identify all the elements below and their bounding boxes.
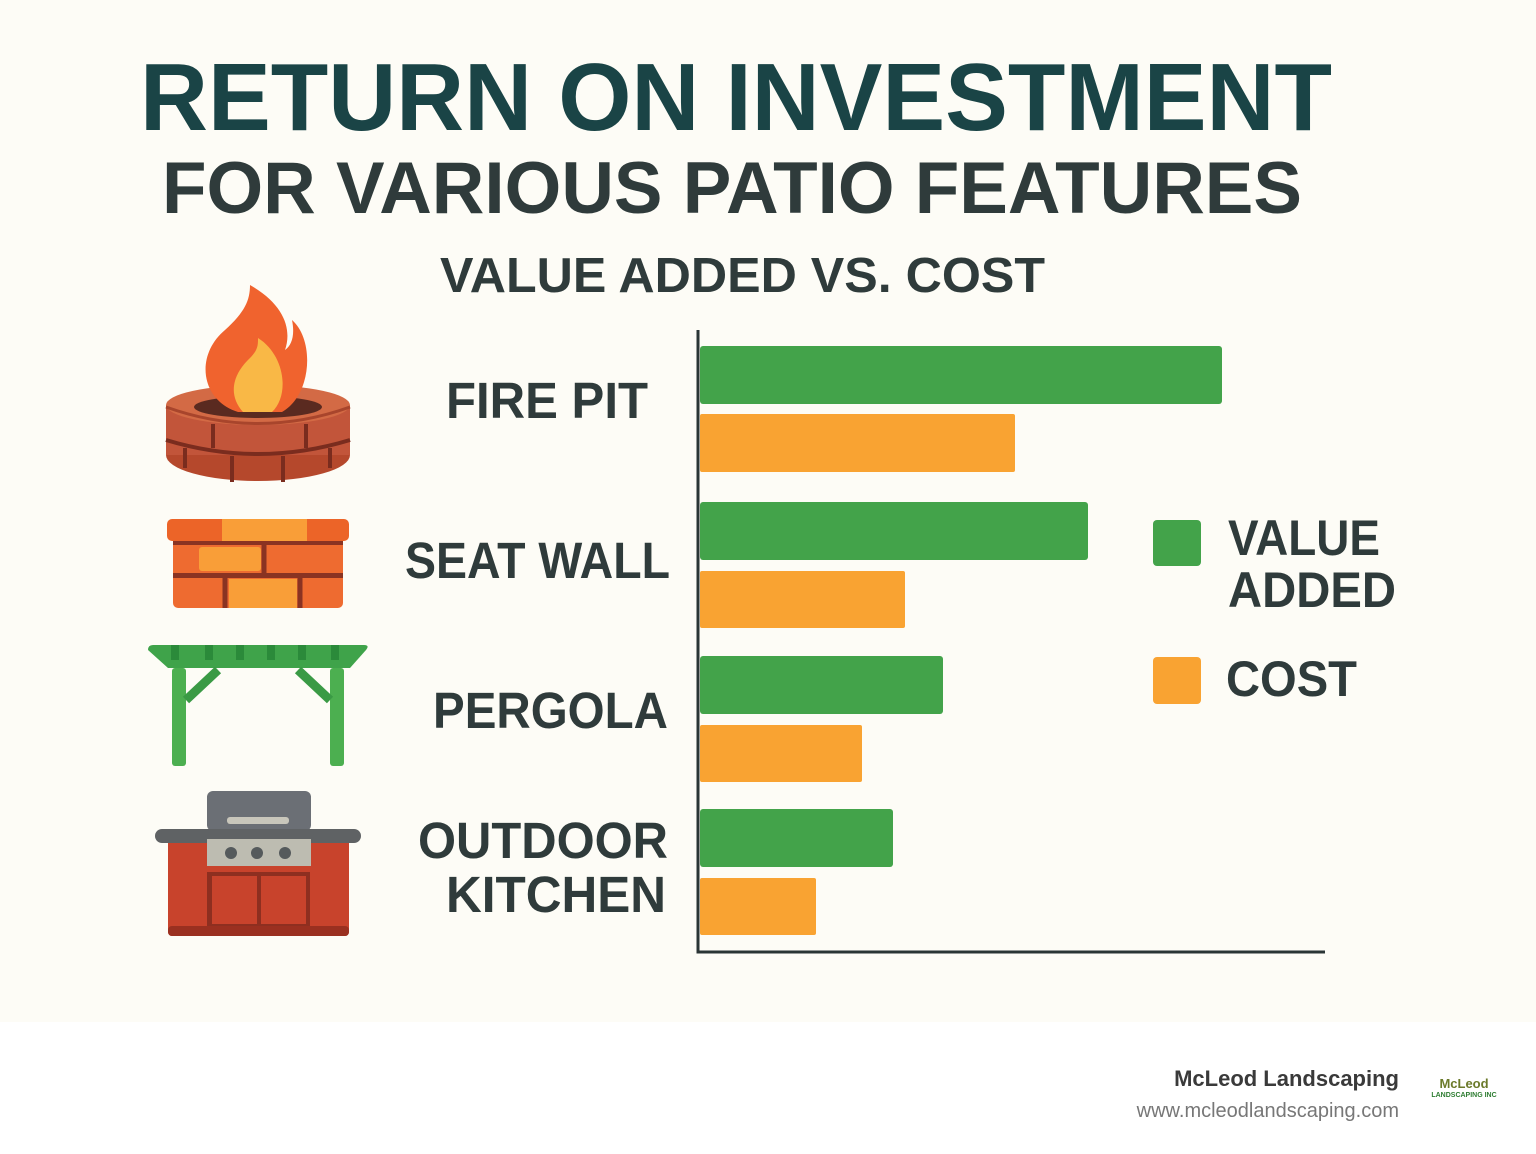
legend: ADDED — [1228, 562, 1396, 618]
bar chart — [698, 330, 1325, 952]
label: pergola: PERGOLA — [433, 682, 668, 739]
label: outdoor kitchen: OUTDOOR — [418, 812, 668, 869]
icon: pergola — [148, 645, 368, 766]
subtitle line 2: FOR VARIOUS PATIO FEATURES — [162, 148, 1302, 229]
icon: fire pit — [166, 285, 350, 482]
label: outdoor kitchen — [418, 812, 668, 923]
legend — [1153, 510, 1396, 707]
icon: seat wall — [167, 519, 349, 608]
logo: LANDSCAPING INC — [1431, 1092, 1497, 1099]
title — [140, 44, 1332, 229]
legend: COST — [1226, 651, 1357, 707]
footer brand: www.mcleodlandscaping.com — [1136, 1100, 1399, 1122]
chart subtitle: VALUE ADDED VS. COST — [440, 249, 1045, 303]
label: seat wall: SEAT WALL — [405, 532, 670, 589]
logo — [1431, 1076, 1497, 1099]
footer brand — [1136, 1066, 1399, 1122]
legend: VALUE — [1228, 510, 1380, 566]
label: outdoor kitchen: KITCHEN — [446, 866, 666, 923]
footer brand: McLeod Landscaping — [1174, 1066, 1399, 1091]
icon: outdoor kitchen — [155, 791, 361, 936]
logo: McLeod — [1439, 1076, 1489, 1091]
label: fire pit: FIRE PIT — [446, 372, 648, 429]
title: RETURN ON INVESTMENT — [140, 44, 1332, 151]
